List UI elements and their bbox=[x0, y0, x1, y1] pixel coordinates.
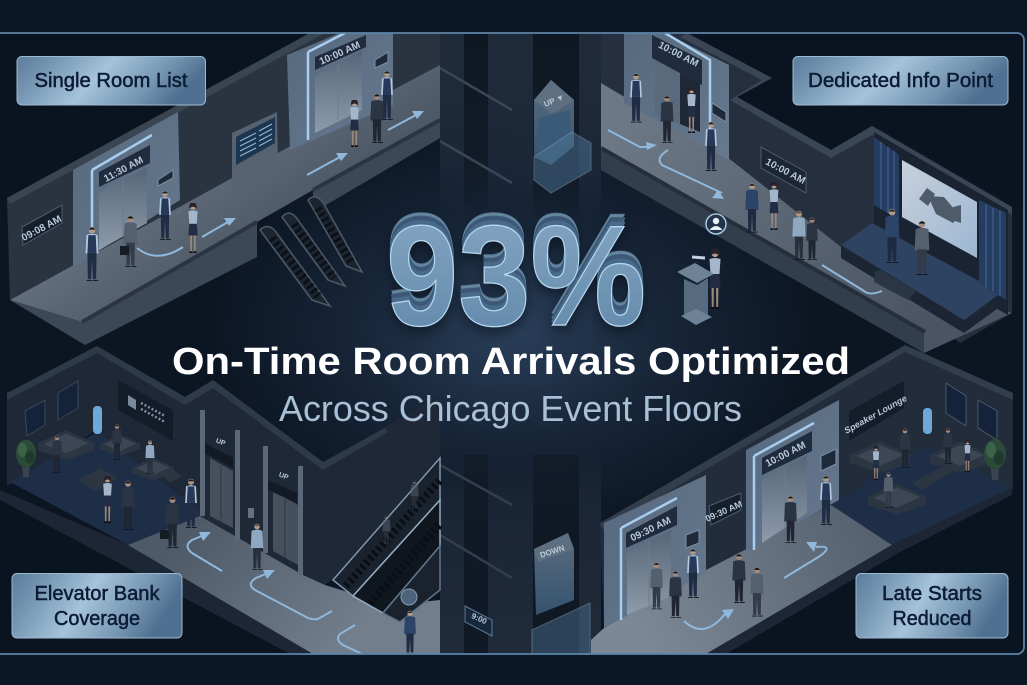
people bbox=[86, 71, 393, 281]
elevator cabin: lower: DOWN bbox=[539, 543, 566, 560]
route arrows bbox=[608, 130, 882, 294]
headline: On-Time Room Arrivals Optimized bbox=[172, 341, 850, 383]
route arrows bbox=[188, 532, 362, 654]
door: 10:00 AM: 10:00 AM bbox=[318, 40, 362, 68]
slab side bbox=[0, 490, 320, 654]
escalators: upper left bbox=[260, 197, 362, 306]
subheading: Across Chicago Event Floors bbox=[279, 388, 742, 429]
central shaft: upper bbox=[440, 33, 601, 223]
label: Late Starts Reduced: Reduced bbox=[892, 608, 972, 630]
wall sign: 09:30 AM: 09:30 AM bbox=[704, 499, 744, 524]
screen bbox=[902, 160, 977, 258]
panel: Dedicated Info Point corridor bbox=[601, 33, 1012, 353]
icon: info point person badge bbox=[706, 214, 726, 234]
label: Late Starts Reduced bbox=[856, 574, 1008, 638]
elevator cabin: upper: UP ▼ bbox=[543, 93, 566, 109]
label: Dedicated Info Point: Dedicated Info Point bbox=[808, 70, 993, 92]
label: Single Room List bbox=[17, 56, 206, 105]
info desk lectern and host bbox=[677, 248, 720, 325]
label: Single Room List: Single Room List bbox=[34, 70, 188, 92]
wall bbox=[7, 346, 440, 585]
shaft sign bbox=[465, 606, 492, 636]
door: 10:00 AM bbox=[287, 33, 440, 150]
route arrows bbox=[684, 542, 827, 629]
lamp bbox=[93, 406, 102, 434]
label: Elevator Bank Coverage: Coverage bbox=[54, 608, 140, 630]
floor bbox=[601, 83, 1012, 353]
lounge posters and sign bbox=[25, 380, 173, 441]
door: 10:00 AM bbox=[746, 400, 839, 551]
lounge posters and lamp bbox=[923, 383, 997, 440]
label: Dedicated Info Point bbox=[793, 56, 1008, 105]
elevator cabin: lower bbox=[532, 533, 590, 654]
panel: Late Starts Reduced corridor bbox=[591, 345, 1013, 654]
door: 09:30 AM bbox=[604, 475, 706, 628]
elevators: UP bbox=[215, 438, 227, 448]
lounge furniture bbox=[16, 425, 182, 492]
shaft sign: 9:00 bbox=[470, 611, 489, 626]
icon: badge marker bbox=[401, 589, 417, 605]
label: Elevator Bank Coverage: Elevator Bank bbox=[34, 583, 160, 605]
wall bbox=[601, 33, 1012, 343]
door: 10:00 AM bbox=[624, 33, 729, 160]
door: 10:00 AM: 10:00 AM bbox=[764, 440, 808, 470]
wall bbox=[600, 345, 1013, 628]
escalators: lower bbox=[333, 458, 440, 622]
presenters bbox=[885, 209, 899, 263]
corridor floor bbox=[591, 505, 892, 654]
stage with screen bbox=[841, 132, 1008, 333]
elevators: UP bbox=[278, 472, 290, 482]
room sign: 09:08 AM: 09:08 AM bbox=[20, 214, 64, 244]
curtains bbox=[874, 137, 899, 220]
slab side bbox=[706, 488, 1012, 654]
metric: 93%: 93% bbox=[386, 195, 646, 355]
lounge floor bbox=[831, 445, 1012, 545]
door: 09:30 AM: 09:30 AM bbox=[629, 515, 673, 544]
route arrows bbox=[137, 111, 424, 256]
label: Elevator Bank Coverage bbox=[12, 574, 182, 638]
slab side bbox=[10, 222, 257, 345]
lounge furniture bbox=[850, 429, 1006, 514]
door: 11:30 AM bbox=[73, 112, 180, 267]
floor bbox=[10, 64, 440, 322]
sign: Speaker Lounge: Speaker Lounge bbox=[842, 393, 909, 436]
people bbox=[630, 73, 818, 260]
panel: Elevator Bank Coverage corridor bbox=[0, 346, 440, 654]
door: 11:30 AM: 11:30 AM bbox=[102, 155, 145, 185]
label: Late Starts Reduced: Late Starts bbox=[882, 583, 982, 605]
people bbox=[103, 476, 419, 654]
lounge floor bbox=[10, 432, 205, 545]
central shaft: lower bbox=[440, 440, 601, 654]
elevator cabin: upper bbox=[534, 80, 591, 193]
wall bbox=[7, 33, 440, 300]
elevators bbox=[200, 410, 303, 575]
door: 10:00 AM: 10:00 AM bbox=[656, 40, 700, 70]
steps bbox=[874, 270, 916, 300]
panel: Single Room List corridor bbox=[7, 33, 440, 345]
people bbox=[650, 476, 832, 618]
wall sign: 10:00 AM: 10:00 AM bbox=[763, 157, 807, 187]
schedule display kiosk bbox=[232, 112, 278, 192]
icon: handshake bbox=[919, 188, 961, 223]
corridor floor bbox=[128, 516, 440, 654]
wall sign: 10:00 AM bbox=[761, 147, 807, 193]
